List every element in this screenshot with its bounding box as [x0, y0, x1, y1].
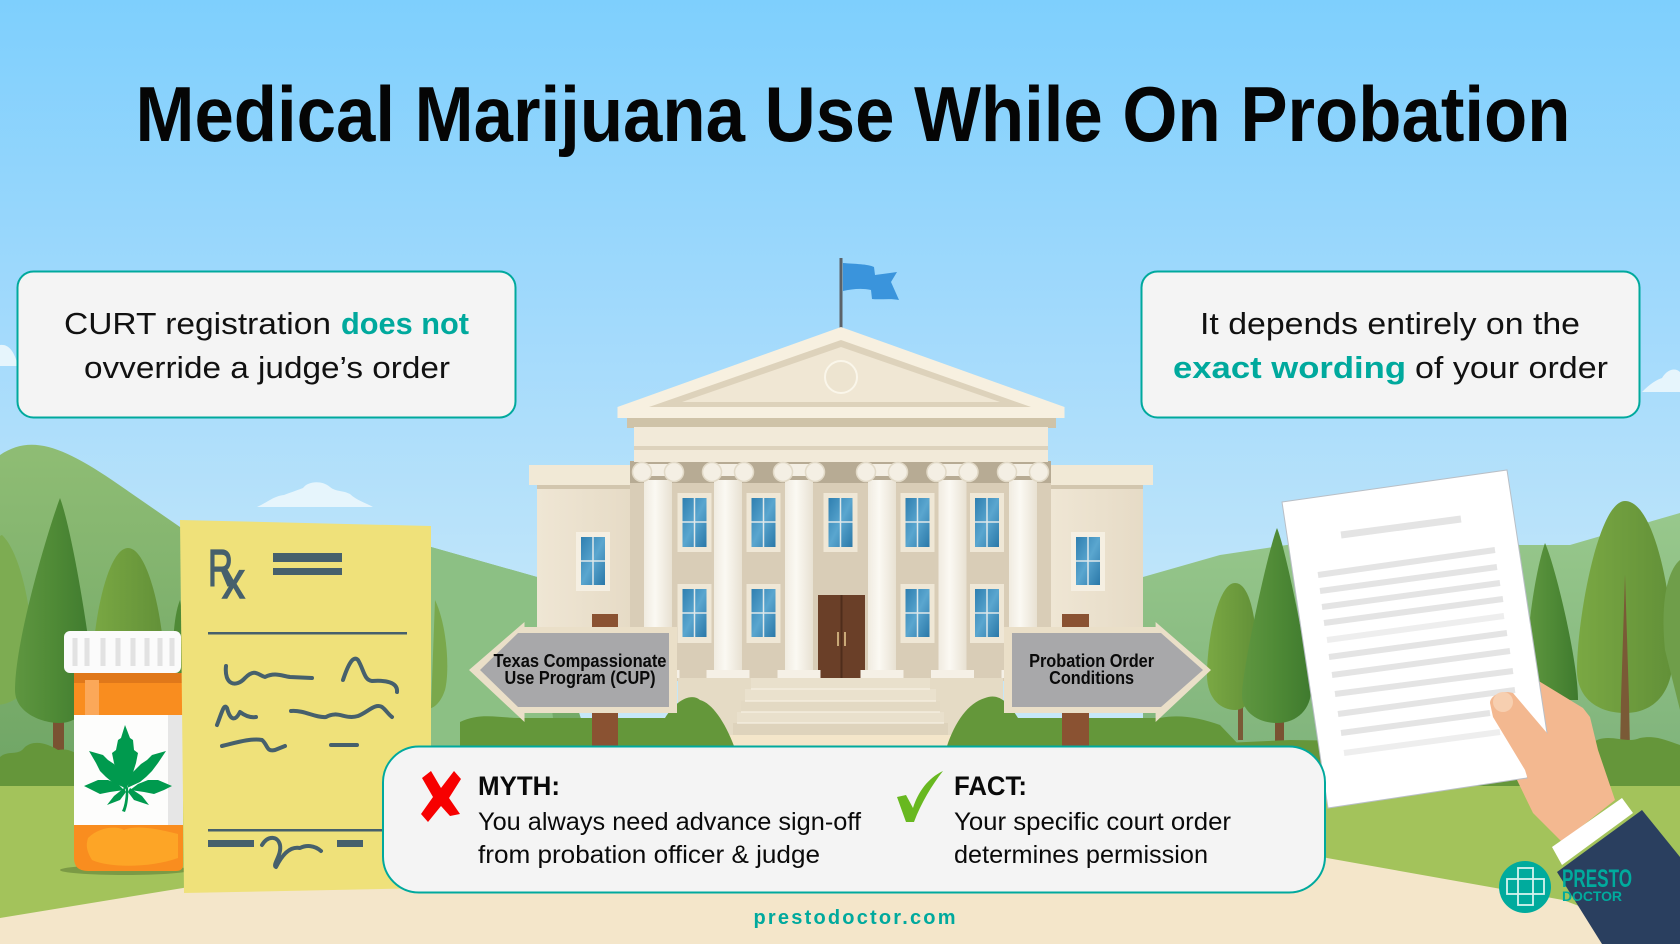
shrubs at courthouse [460, 696, 1240, 746]
pill bottle [60, 631, 190, 875]
icon: green check [897, 771, 943, 822]
title: Medical Marijuana Use While On Probation [136, 70, 1570, 158]
sign label: Conditions [1049, 668, 1134, 688]
bottom rule [208, 829, 383, 832]
trees left [0, 498, 447, 754]
callout: CURT registration: does not [341, 306, 469, 341]
icon: red cross [421, 771, 461, 822]
myth text: You always need advance sign-off [478, 808, 861, 836]
callout: exact wording: It depends entirely on the [1200, 306, 1580, 341]
prescription paper [180, 520, 431, 893]
handwriting scribbles [217, 659, 397, 867]
hedges [0, 737, 1680, 787]
sign: Texas Compassionate Use Program [469, 614, 677, 746]
icon: cannabis leaf [84, 725, 172, 812]
hand behind document [1500, 670, 1615, 842]
website url: prestodoctor.com [754, 907, 956, 929]
door [818, 595, 865, 678]
pediment [618, 327, 1064, 418]
rule [208, 632, 407, 634]
shirt cuff [1552, 798, 1633, 865]
myth text [478, 771, 861, 869]
callout: CURT registration: CURT registration [64, 306, 331, 341]
fact text: FACT: [954, 771, 1027, 801]
fact text [954, 771, 1231, 869]
wings [529, 465, 1153, 685]
columns [632, 462, 1048, 678]
logo: DOCTOR [1562, 888, 1622, 904]
sign label: Use Program (CUP) [504, 668, 656, 688]
callout: exact wording: exact wording [1173, 350, 1406, 385]
grass ground [0, 786, 1680, 944]
trees right [1207, 501, 1680, 752]
courthouse [529, 258, 1153, 735]
entablature [627, 418, 1056, 462]
clouds [0, 345, 1680, 507]
flag [843, 263, 899, 300]
callout: exact wording: of your order [1415, 350, 1608, 385]
windows [576, 493, 1105, 643]
court order document [1282, 470, 1547, 808]
callout: CURT registration: ovverride a judge’s order [84, 350, 450, 385]
myth text: MYTH: [478, 771, 560, 801]
Rx symbol: R [208, 540, 233, 598]
signature dashes [208, 840, 363, 847]
sign: Probation Order Conditions [1004, 614, 1211, 746]
sign label: Texas Compassionate [494, 651, 666, 671]
callout: CURT registration [18, 272, 516, 418]
callout: exact wording [1142, 272, 1640, 418]
Rx symbol: x [222, 552, 245, 610]
thumb [1490, 692, 1552, 783]
central wall [630, 461, 1051, 681]
document lines [1318, 519, 1515, 753]
pills [87, 827, 178, 866]
jacket sleeve [1552, 798, 1680, 944]
myth text: from probation officer & judge [478, 841, 820, 869]
fact text: determines permission [954, 841, 1208, 869]
fact text: Your specific court order [954, 808, 1231, 836]
header bars [273, 553, 342, 575]
sand path [0, 733, 1680, 944]
sign label: Probation Order [1029, 651, 1154, 671]
flag pole [840, 258, 842, 328]
panel: myth and fact [383, 746, 1325, 892]
steps [678, 678, 1003, 735]
hills [0, 445, 1680, 780]
logo: PRESTO [1562, 865, 1632, 893]
logo [1499, 861, 1632, 913]
